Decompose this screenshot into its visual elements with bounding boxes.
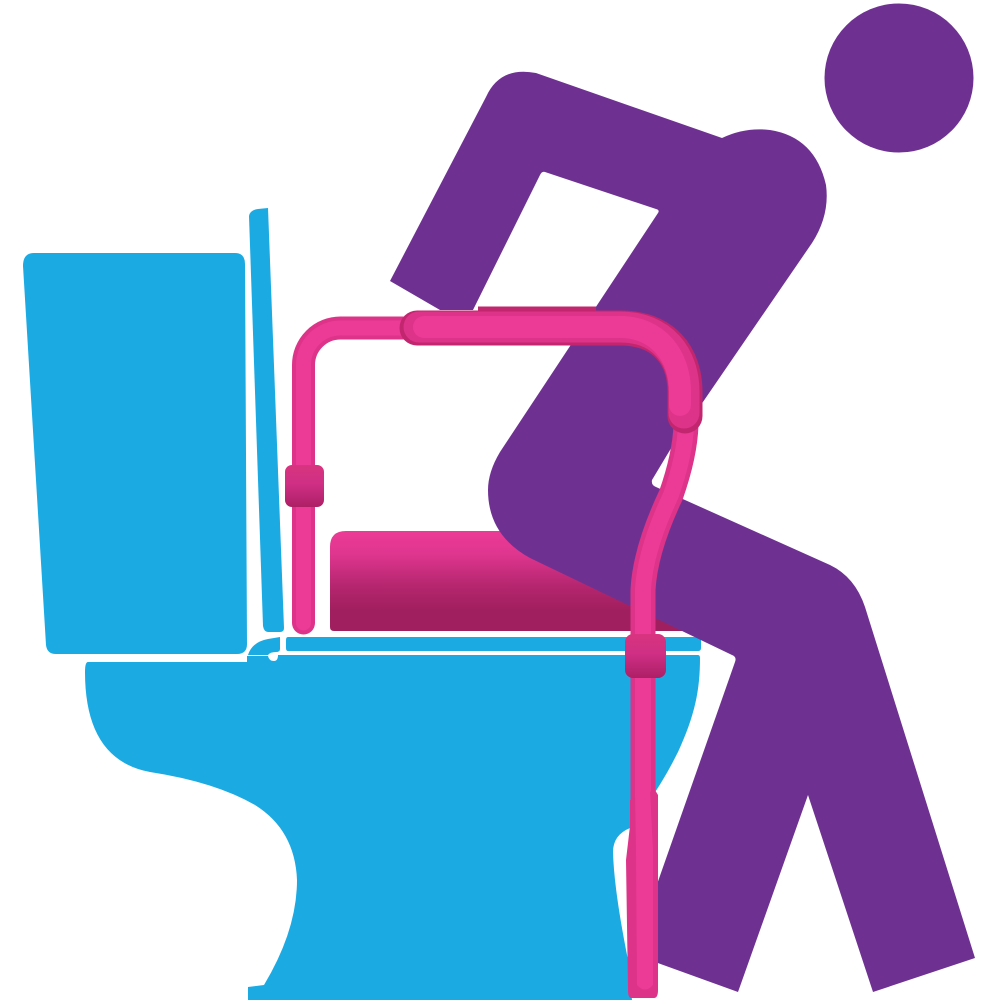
rail: left thin tube xyxy=(304,328,410,623)
safety rail xyxy=(304,309,686,998)
person head xyxy=(824,4,974,152)
rail: right thin tube and leg xyxy=(626,425,686,998)
toilet tank xyxy=(23,253,247,654)
raised seat cushion xyxy=(330,531,692,631)
toilet lid xyxy=(249,208,284,632)
person body xyxy=(390,72,975,992)
toilet bowl xyxy=(85,655,700,1000)
rail: left clamp xyxy=(285,465,324,507)
toilet hinge xyxy=(248,637,280,655)
toilet seat strip xyxy=(286,637,701,651)
rail: right clamp xyxy=(625,634,666,678)
rail: thick upper grip xyxy=(417,309,685,416)
